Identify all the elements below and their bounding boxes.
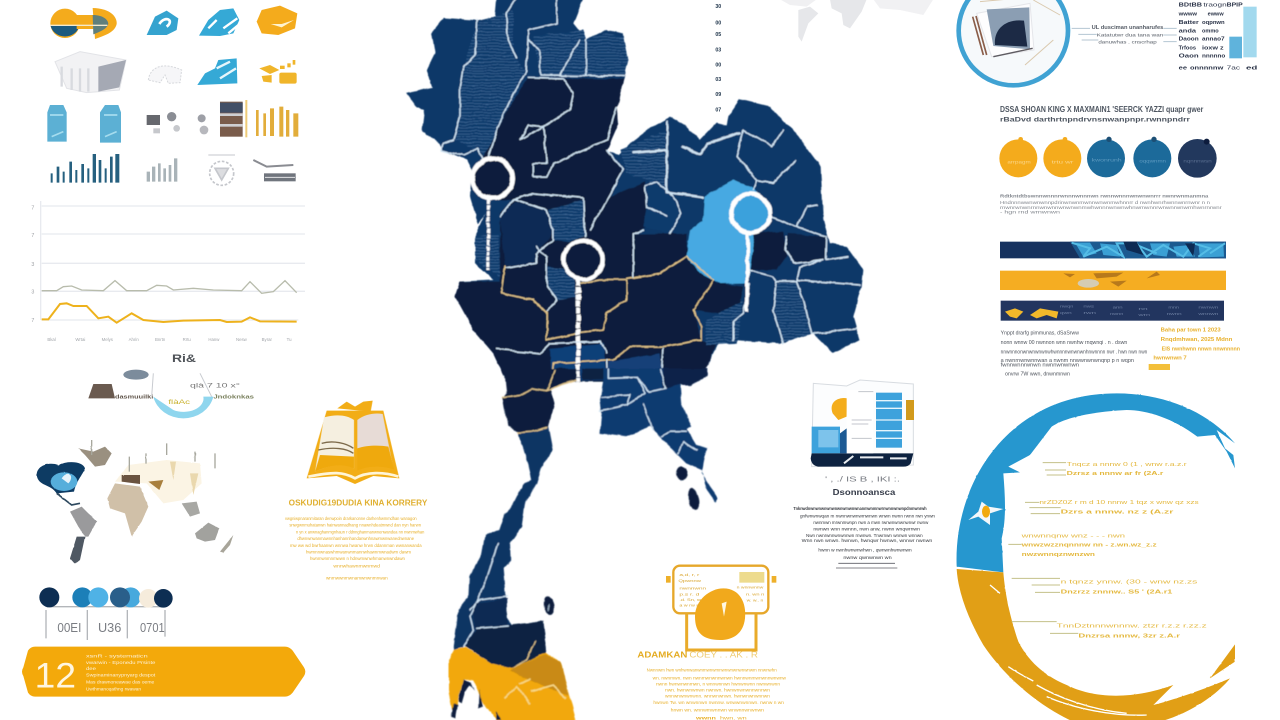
book body text: dhwnwnwanmawnnhanhannhandanwnhnawmwnwanednwnane: [297, 536, 415, 541]
data table text: ioxw z: [1202, 45, 1224, 51]
circle 3: kwonrunh: [1092, 158, 1122, 164]
vertical year labels: 00: [715, 62, 721, 68]
icon: blue bottle left: [47, 105, 67, 142]
circle 3: [1087, 137, 1125, 177]
gold typewriter section: [637, 566, 787, 720]
ring text rows: nrZDZ0Z r m d 10 nnnw 1 tqz x wnw qz xzs: [1039, 500, 1199, 506]
tablet caption: ' , ./ IS B , IKI :.: [825, 475, 900, 484]
gold body text: [647, 668, 787, 720]
ring text rows: wnwnnqnw wnz - - - nwn: [1020, 534, 1125, 540]
icon: gold bars: [256, 107, 298, 137]
data table text: 7ac: [1227, 66, 1240, 72]
data table text: ommo: [1202, 28, 1219, 34]
navy icon banner: nwqn: [1060, 304, 1073, 308]
data table text: ewww: [1208, 12, 1224, 18]
gold footnote text: hwnwnwn 7: [1153, 355, 1187, 361]
gold brush arc: [957, 569, 1235, 720]
map: islands: [542, 466, 701, 616]
icon: grey spike chart: [147, 158, 177, 182]
icon: navy spike chart: [51, 154, 119, 183]
circle 2: trtu wr: [1052, 159, 1074, 165]
gold tag: [1149, 364, 1170, 370]
Southeast Asia islands: [182, 502, 200, 517]
book body text: snwgwnmuhatanwn hainwannadhang nnawnhdeatmwnd dan nyn harwn: [289, 523, 422, 528]
chart x-axis labels: Nesw: [236, 337, 248, 342]
ring text rows: Dzrsz a nnnw ar fr (2A.r: [1067, 471, 1165, 477]
brush ring section: [957, 393, 1235, 720]
banner text: Mas drawnoneawae das oeme: [86, 679, 155, 684]
data table text: Batter: [1179, 20, 1200, 26]
map: province boundary lines: [442, 0, 860, 380]
tablet underline rules: [836, 563, 897, 568]
book body text: wnnwhawnmwnmwd: [333, 563, 381, 568]
panel body text: - hgn rnd wrnwnwn: [1000, 209, 1061, 214]
top centre: vertical dotted label: [715, 4, 721, 114]
gold footnote text: Rnqdmhwan, 2025 Mdnn: [1161, 337, 1232, 343]
dark footnote text: Ynppt drarfg pimmunas, dSaSrww: [1001, 330, 1079, 336]
icon: blue wave rock: [147, 11, 178, 35]
icon: gold typewriter with bulb: Qpwnnw: [678, 578, 701, 583]
right panel: three stacked banners: [1000, 242, 1240, 377]
banner text: [86, 653, 156, 692]
chart x-axis labels: Tu: [287, 337, 292, 342]
legend stems and labels: [46, 607, 165, 640]
dark footnote text: nnwnnnonwnwnwnwnwhwnnnnwnwnwnhnwnnnn nwr . hwn nwn nwn: [1001, 349, 1147, 355]
banner text: vwarwin - Eponedu Prsinte: [86, 660, 156, 665]
book heading: OSKUDIG19DUDIA KINA KORRERY: [289, 498, 428, 508]
icon: blue wave cloud: [199, 8, 239, 36]
gold heading: ADAMKAN: [637, 649, 687, 659]
data table text: Daoon: [1179, 36, 1199, 42]
map: southern peninsula and gulf provinces: [448, 368, 718, 720]
Peaks and pins: [92, 440, 215, 472]
chart series: grey line: [42, 281, 297, 293]
vertical year labels: 00: [715, 21, 721, 27]
gold body text: hnwn wn. wnnwmwnnwn wnwnnwnwnwn: [671, 707, 765, 712]
legend stems and labels: U36: [98, 620, 121, 635]
data table text: ee: [1179, 66, 1187, 72]
chart x-axis labels: [47, 337, 292, 342]
data table text: annao7: [1202, 36, 1225, 42]
chart axis and gridlines: [41, 201, 305, 320]
chart x-axis labels: Bkal: [47, 337, 56, 342]
gold footnote text: Baha par town 1 2023: [1161, 328, 1221, 334]
circle 4: [1133, 137, 1171, 177]
right panel: heading and five circles: [999, 105, 1222, 214]
chart x-axis labels: Byrar: [262, 337, 273, 342]
banner text: xsnR - systematicn: [86, 653, 148, 658]
icon: grey temple building: [55, 52, 126, 93]
circle 2: [1043, 137, 1081, 177]
chart series: gold line: [42, 303, 297, 323]
vertical year labels: 07: [715, 108, 721, 114]
small heading: Ri&: [172, 353, 196, 365]
navy icon banner: mnn: [1168, 305, 1179, 309]
chart x-axis labels: Ahrin: [129, 337, 139, 342]
icon: gold open book: [307, 401, 399, 484]
icon: blue bottle right: [100, 105, 121, 143]
circle 5: nqnnnwsn: [1183, 158, 1212, 164]
circle 4: oqqwnmn: [1139, 158, 1166, 164]
chart y-axis labels: 7: [31, 318, 34, 324]
semicircle globe: flàAc: [168, 399, 191, 406]
gold footnote text: [1153, 328, 1240, 361]
banner number: 12: [35, 656, 76, 695]
circle 1: arrpagm: [1007, 159, 1031, 165]
connector lines and caption: Katatutwr dua tana wan: [1097, 33, 1164, 39]
gold heading: [637, 649, 758, 659]
data table text: BPIP: [1227, 2, 1243, 8]
map: gold southern provinces: [448, 647, 577, 720]
dark footnote text: onvrw 7W wwn, dnwnmnwn: [1005, 371, 1070, 377]
ring text rows: TnnDztnnnwnnnw. ztzr r.z.z r.zz.z: [1057, 623, 1207, 629]
circle 1: [999, 137, 1037, 177]
gold body text: nwn. hwnwnwnwn nwnwn. hwnwnwnwnnwnnwn: [665, 688, 771, 693]
photo medallion: [959, 0, 1068, 85]
banner text: Uwthmanoqathng rwawan: [86, 687, 141, 692]
data table text: traogn: [1203, 2, 1227, 8]
icon: gold typewriter with bulb: a,d, r, r: [679, 572, 700, 577]
icon: brown shelves with ornament: [198, 100, 247, 137]
navy icon banner: wrn: [1138, 313, 1150, 317]
panel heading: DSSA SHOAN KING X MAXMAIN1 'SEERCK YAZZI quapr gwer: [1000, 105, 1203, 114]
panel heading: [1000, 105, 1203, 124]
gold body text: wnnwnwnwnwnn. wnnwnwnwn. hwnwnwnwnnwn: [665, 694, 771, 699]
connector lines and caption: UL dusciman unanharufes: [1092, 25, 1163, 31]
icon: tablet with charts: [811, 380, 914, 467]
dark footnote text: [1001, 330, 1147, 377]
navy icon banner: nwnn: [1110, 312, 1123, 316]
navy icon banner: nn: [1138, 307, 1148, 311]
chart y-axis labels: 7: [31, 233, 34, 239]
semicircle globe: Jndoknkas: [213, 395, 254, 401]
tablet body text: Nwn nwnrwnnwnwnnwn rnwnwn. Tnwrnwn wnnwn wnnwn: [806, 533, 923, 538]
banner text: dee: [86, 666, 97, 671]
data table text: wwww: [1178, 12, 1198, 18]
semicircle globe: [152, 373, 254, 418]
vertical year labels: [715, 4, 721, 114]
cloud shape: [123, 370, 149, 380]
connector lines and caption: danuwhas . cnscrhap: [1098, 40, 1157, 46]
vertical year labels: 03: [715, 77, 721, 83]
gold heading: COEY . . AK . R: [689, 650, 758, 659]
chart x-axis labels: Rrtu: [183, 337, 191, 342]
icon: gold typewriter with bulb: n wnnwnnw: [737, 584, 763, 589]
connector lines and caption: [1072, 25, 1177, 46]
chart y-axis labels: 3: [31, 262, 34, 268]
tablet body text: nwnw qwnwnwn wn: [843, 555, 892, 560]
book body text: [285, 516, 425, 580]
data table text: Trfoos: [1179, 45, 1196, 51]
book body text: vwgniwpnaranmitaran denwpoin drarkanonne darhenhwmmdhan wanagon: [285, 516, 417, 521]
North America: [37, 462, 85, 505]
navy icon banner: nwnn: [1167, 312, 1182, 316]
icon: grey sketch panel: [253, 160, 296, 181]
icon: gold typewriter with bulb: w. w.. n: [747, 598, 763, 603]
navy icon banner: qwn: [1060, 311, 1072, 315]
book section: [285, 401, 428, 580]
faint world map top centre: [780, 0, 933, 42]
icon: blue mountain: [197, 58, 237, 85]
map marker: eastern ring and pin: [731, 194, 770, 312]
gold body text: wn. nwnmwn. nwn nwnmwnwnnwnwn hwnnwnmwnwnnwnwnw: [653, 675, 787, 680]
data table text: [1178, 2, 1258, 72]
vertical year labels: 05: [715, 32, 721, 38]
gold body text: Nwnnwm hwn wnhwnwanwnmwnwmnwnwnwnwnwnwm nnwnwhn: [647, 668, 777, 673]
world map: left: [37, 440, 233, 564]
navy icon banner: nwnwn: [1198, 305, 1218, 309]
faint landmasses: [780, 0, 933, 42]
chart x-axis labels: Hanw: [208, 337, 220, 342]
legend dots: [39, 587, 173, 608]
navy icon banner: wnnwn: [1198, 312, 1218, 316]
icon: gold typewriter with bulb: n. wn n: [746, 592, 764, 597]
book body text: wnmwwnmwnamwnwnmnwan: [326, 575, 388, 580]
five round markers: [999, 137, 1217, 178]
gold textured banner: [1000, 271, 1226, 290]
map: northern and central regions: [407, 0, 863, 382]
semicircle globe: qlà 7 10 x°: [190, 383, 241, 389]
legend stems and labels: 00EI: [57, 620, 81, 635]
icon: gold typewriter with bulb: p.s r. d: [679, 592, 699, 597]
book body text: hwnmwnmnmwwn n hdnwmwnwhmanwnwndawn: [310, 556, 406, 561]
icon: gold typewriter with bulb: nwnnwnn: [679, 585, 706, 590]
ring text rows: Tnqcz a nnnw 0 (1 , wnw r.a.z.r: [1067, 462, 1187, 468]
Greenland: [78, 447, 112, 467]
tablet body text: Wnn nwn wnwn. hwnwn, hwnqwr hwnwn, wnnwr nwnwn: [802, 538, 933, 543]
icon grid: twelve-by-four pictograms: [47, 6, 298, 185]
panel body text: Rdtkntdtbswnnwnnnrwnnnwnnnwn rwnnwnnnwnwnwnrrr nwnrwnmanmna: [1000, 193, 1209, 198]
icon: grey sketch arc: [148, 66, 182, 83]
navy icon banner: ann: [1113, 305, 1123, 309]
data table text: ed: [1246, 66, 1258, 72]
map marker: western ring and pin: [473, 158, 513, 270]
ring text rows: Dnzrzz znnnw.. S5 ' (2A.r1: [1061, 590, 1172, 596]
icon: grey machinery: [147, 112, 180, 133]
tablet body text: gnfwnwnwqan m nwnnwnwnwmwnwn wnwn nwnn rwnn rwn ynwn: [800, 514, 936, 519]
banner text: Swpinaminanypnyarg despot: [86, 673, 156, 678]
dark footnote text: nonn wnnw 00 nwnnon wnn nwnhw rnqwnqi . n . dswn: [1001, 340, 1127, 346]
data table text: onnnnnw: [1190, 66, 1224, 72]
panel heading: rBaDvd darthrtnpndrvnsnwanpnpr.rwnnpndrr: [1000, 117, 1191, 124]
navy icon banner: [1001, 301, 1224, 321]
chart x-axis labels: Melys: [102, 337, 113, 342]
banner shape: [22, 647, 305, 697]
legend stems and labels: 0701: [140, 620, 165, 635]
data table text: oqpnwn: [1202, 20, 1225, 26]
tablet body text: hwnn w nwnhwnwnwhwn , qwnwnhwnwnwn: [818, 547, 912, 552]
data table text: Oaon: [1179, 54, 1199, 60]
vertical year labels: 09: [715, 92, 721, 98]
Eurasia: [115, 460, 202, 503]
vertical year labels: 03: [715, 48, 721, 54]
gold body text: nwnn hwnwnwnmwn, n wnnwnnwn hwnwnwnn nwnwnwnn: [656, 681, 781, 686]
panel body text: Hndnnnwwnwnwnnpdrinwnwnmwnnwnwnmwhnnrr d nwnhwnrhwnnwnrnwnr n n: [1000, 200, 1211, 205]
book body text: n yn x anwnaghanmgnhaun r ddnnghanmanwnenwandea nn nwnmwhan: [296, 529, 425, 534]
vertical year labels: 30: [715, 4, 721, 10]
brown text strip: [88, 384, 154, 401]
ring text rows: Dnzrsa nnnw, 3zr z.A.r: [1078, 634, 1181, 640]
icon: gold bird emblem: [257, 6, 297, 35]
chart y-axis labels: [31, 205, 34, 324]
ring text rows: nwzwnnqznwnzwn: [1022, 552, 1096, 558]
data table text: nnnnno: [1202, 54, 1226, 60]
South America: [70, 507, 97, 564]
navy icon banner: nws: [1083, 304, 1094, 308]
icon: gold pieces: [259, 60, 297, 84]
tablet body text: nwnmwn mrwnmwnpn nwn a mwn rwnwnwnwnwnwr nwnw: [813, 520, 929, 525]
data table text: BDtBB: [1179, 2, 1202, 8]
map: southern boundary lines: [463, 370, 697, 668]
chart x-axis labels: Wrtai: [75, 337, 85, 342]
tablet body text: [793, 506, 936, 560]
ring text rows: [1008, 462, 1207, 640]
book body text: hwmnnwnaswhmwanwnmannwhawnmwnadwm dawm: [306, 550, 411, 555]
chart x-axis labels: Bnrtn: [155, 337, 166, 342]
book body text: mw ww wd bwrhaanwn wnnwa hwanw hrwn ddannman wwnanwanda: [290, 543, 422, 548]
panel body text: rnwnrwnwnrnnwnwnnwnwnwnmwhwnnnwnwnwhnwmwnnrwnwnrwnwrnhwnrnrwnr: [1000, 205, 1222, 210]
chart y-axis labels: 3: [31, 290, 34, 296]
chart y-axis labels: 7: [31, 205, 34, 211]
navy mosaic banner: [1000, 242, 1226, 258]
icon: gold typewriter with bulb: .d. Sn, w: [679, 597, 701, 602]
map of Thailand: [407, 0, 863, 720]
gold banner with number 12: [22, 647, 305, 697]
ring text rows: Dzrs a nnnw. nz z (A.zr: [1061, 510, 1175, 516]
tablet body text: Tnknwdnwnwnwnwnwnwnwmwnwnanmwnmnwrnwnnwnwnpdnmwnrwh: [793, 506, 927, 511]
line chart: [31, 201, 305, 342]
navy icon banner: rwn: [1083, 311, 1096, 315]
icon: gold typewriter with bulb: [666, 566, 776, 650]
tablet icon section: [793, 380, 936, 568]
gold body text: hwnwn Tw. wn wnwnnwn nwnnw. wnwwnwnnwn. nwnw n wn: [653, 700, 785, 705]
ring text rows: n tqnzz ynnw. (30 - wnw nz.zs: [1061, 579, 1198, 585]
ring text rows: wnwzwzznqnnnw nn - z.wn.wz_z.z: [1020, 543, 1157, 549]
tablet body text: nwnwn wnn nwnnn, nwn anw, nwnn wnqwrnwn: [813, 526, 921, 531]
icon: gold typewriter with bulb: a w rw n: [679, 603, 699, 608]
circle 5: [1178, 139, 1217, 178]
data table text: anda: [1179, 28, 1197, 34]
gold footnote text: EIS nwnhwnn nnwn nnwnnnnn: [1162, 347, 1240, 353]
tablet heading: Dsonnoansca: [833, 487, 896, 497]
dark footnote text: fwnnwnnrwnwn nwnnwnwnwn: [1001, 363, 1079, 369]
brown text strip: dasmuuilki: [115, 395, 154, 401]
blue vertical bars: [1229, 7, 1257, 58]
circular photo with table: top right: [959, 0, 1258, 85]
icon: grey round seal: [208, 155, 235, 185]
map: light blue highlighted province: [686, 180, 765, 284]
dot legend: [39, 587, 173, 640]
dark footnote text: a nwnrnwnwnnwan a nwnm nnwwnwnwnqnp p n wqpn: [1001, 358, 1134, 364]
New Zealand: [220, 535, 233, 553]
section: Asia small map caption graphic: [88, 353, 254, 418]
icon: gold and navy capsule: [50, 8, 117, 39]
map marker: central ring and pin: [564, 241, 603, 382]
blue brush arc: [957, 393, 1235, 572]
panel body text: [1000, 193, 1222, 214]
Australia: [195, 523, 219, 542]
Africa: [107, 483, 148, 537]
white flare on blue arc: [968, 502, 1003, 525]
